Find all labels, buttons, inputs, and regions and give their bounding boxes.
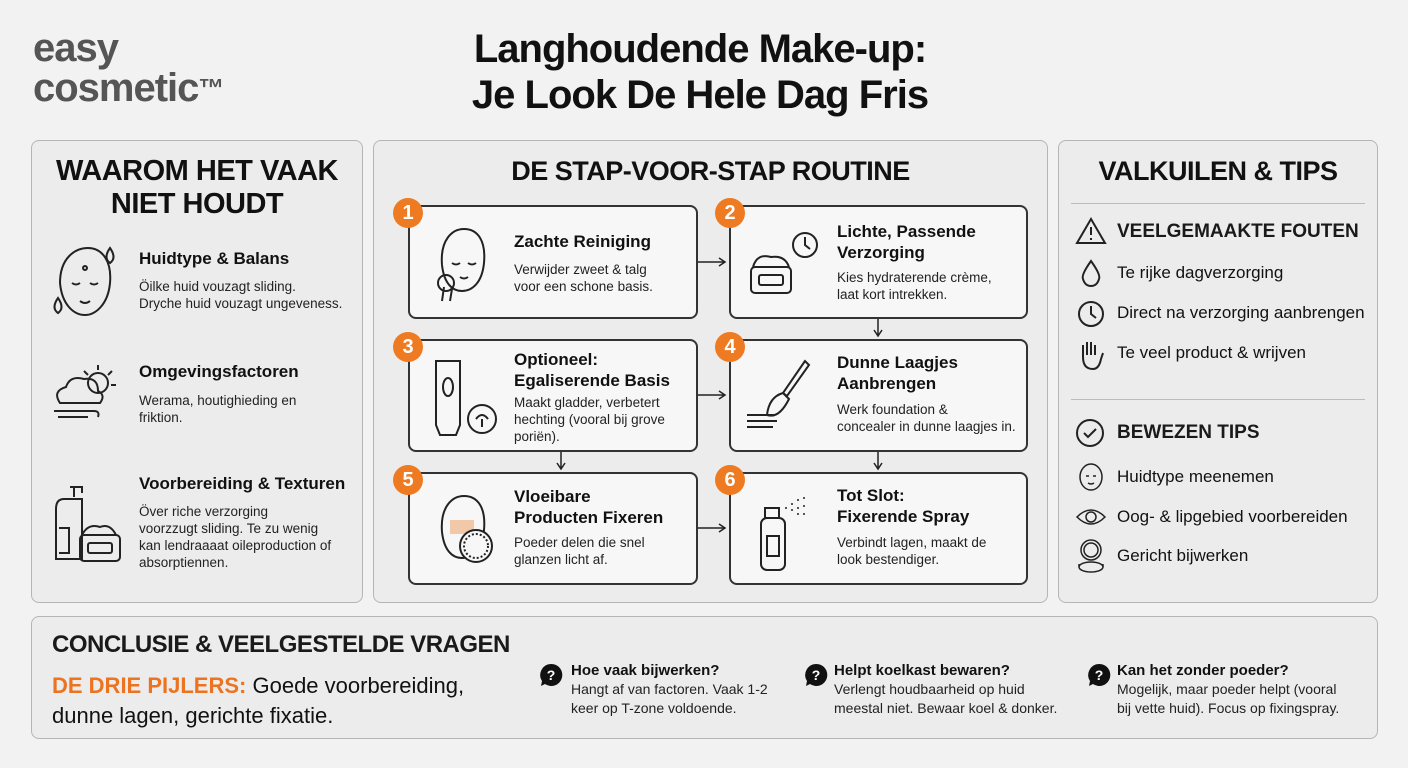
conclusion text: dunne lagen, gerichte fixatie. bbox=[52, 703, 333, 728]
step 1 bbox=[408, 205, 698, 319]
logo: cosmetic™ bbox=[33, 66, 223, 110]
icon: face cleansing bbox=[437, 228, 486, 302]
badge 4 bbox=[715, 332, 745, 362]
icon: warning bbox=[1075, 217, 1107, 244]
icon: face powder bbox=[440, 495, 493, 563]
panel: waarom het vaak niet houdt: voorzzugt sliding. Te zu wenig bbox=[139, 521, 318, 536]
step 6: Fixerende Spray bbox=[837, 507, 969, 526]
step 4: Aanbrengen bbox=[837, 374, 936, 393]
icon: cloud weather bbox=[54, 365, 116, 418]
step 3: Maakt gladder, verbetert bbox=[514, 395, 660, 410]
heading bbox=[56, 155, 338, 220]
faq 2 bbox=[805, 662, 1057, 716]
step 1: voor een schone basis. bbox=[514, 279, 653, 294]
heading: CONCLUSIE & VEELGESTELDE VRAGEN bbox=[52, 631, 510, 658]
step 2 bbox=[729, 205, 1028, 319]
icon: question bubble bbox=[1088, 664, 1110, 686]
item 2 text: Omgevingsfactoren bbox=[139, 362, 299, 381]
badge 5: 5 bbox=[402, 469, 414, 491]
step 6: Tot Slot: bbox=[837, 486, 905, 505]
panel: waarom het vaak niet houdt: Werama, houtighieding en bbox=[139, 393, 296, 408]
badge 4: 4 bbox=[724, 336, 736, 358]
badge 2: 2 bbox=[724, 202, 736, 224]
badge 3: 3 bbox=[402, 336, 414, 358]
step 6: look bestendiger. bbox=[837, 552, 939, 567]
badge 2 bbox=[715, 198, 745, 228]
panel: stap-voor-stap routine bbox=[373, 140, 1048, 603]
icon: spray bottle bbox=[760, 497, 805, 571]
faq 2: meestal niet. Bewaar koel & donker. bbox=[834, 700, 1057, 716]
faq 2: Helpt koelkast bewaren? bbox=[834, 662, 1010, 679]
panel: waarom het vaak niet houdt: kan lendraaaat oileproduction of bbox=[139, 538, 331, 553]
panel: valkuilen & tips: Oog- & lipgebied voorbereiden bbox=[1117, 507, 1348, 526]
icon: brush bbox=[747, 360, 810, 428]
step 1: Verwijder zweet & talg bbox=[514, 262, 647, 277]
icon: drop bbox=[1082, 259, 1100, 287]
faq 3: Mogelijk, maar poeder helpt (vooral bbox=[1117, 681, 1336, 697]
panel: waarom het vaak niet houdt: friktion. bbox=[139, 410, 183, 425]
panel: valkuilen & tips: Te rijke dagverzorging bbox=[1117, 263, 1283, 282]
panel: waarom het vaak niet houdt: Över riche verzorging bbox=[139, 504, 268, 519]
step 6: Verbindt lagen, maakt de bbox=[837, 535, 986, 550]
step 5: glanzen licht af. bbox=[514, 552, 608, 567]
title: Langhoudende Make-up: bbox=[474, 27, 926, 71]
panel: waarom het vaak niet houdt: Öilke huid vouzagt sliding. bbox=[139, 279, 296, 294]
faq 1: keer op T-zone voldoende. bbox=[571, 700, 737, 716]
step 4: Werk foundation & bbox=[837, 402, 948, 417]
icon: cream jar clock bbox=[750, 232, 818, 294]
subheading: fouten: VEELGEMAAKTE FOUTEN bbox=[1117, 221, 1359, 242]
badge 3 bbox=[393, 332, 423, 362]
icon: question bubble: ? bbox=[812, 667, 820, 683]
step 5: Vloeibare bbox=[514, 487, 591, 506]
step 4 bbox=[729, 339, 1028, 452]
item 3 text: Voorbereiding & Texturen bbox=[139, 474, 345, 493]
icon: check bbox=[1076, 419, 1104, 447]
faq 1 bbox=[540, 662, 768, 716]
icon: question bubble: ? bbox=[547, 667, 555, 683]
badge 5 bbox=[393, 465, 423, 495]
faq 1: Hangt af van factoren. Vaak 1-2 bbox=[571, 681, 768, 697]
subheading: tips: BEWEZEN TIPS bbox=[1117, 422, 1260, 443]
icon: question bubble bbox=[805, 664, 828, 686]
step 4: concealer in dunne laagjes in. bbox=[837, 419, 1016, 434]
heading: NIET HOUDT bbox=[111, 188, 283, 220]
icon: eye bbox=[1076, 509, 1106, 525]
step 5: Producten Fixeren bbox=[514, 508, 663, 527]
panel: waarom het vaak niet houdt bbox=[31, 140, 363, 603]
step 2: Verzorging bbox=[837, 243, 925, 262]
icon: face drops bbox=[53, 246, 115, 316]
step 3: Egaliserende Basis bbox=[514, 371, 670, 390]
icon: tube primer bbox=[435, 360, 497, 436]
panel: waarom het vaak niet houdt: Dryche huid vouzagt ungeveness. bbox=[139, 296, 342, 311]
step 2: Lichte, Passende bbox=[837, 222, 976, 241]
panel: valkuilen & tips: Huidtype meenemen bbox=[1117, 467, 1274, 486]
badge 1 bbox=[393, 198, 423, 228]
badge 1: 1 bbox=[402, 202, 414, 224]
faq 3 bbox=[1088, 662, 1339, 716]
step 6 bbox=[729, 472, 1028, 585]
step 1: Zachte Reiniging bbox=[514, 232, 651, 251]
conclusion text bbox=[52, 673, 464, 728]
faq 1: Hoe vaak bijwerken? bbox=[571, 662, 719, 679]
heading: VALKUILEN & TIPS bbox=[1098, 156, 1338, 186]
faq 3: bij vette huid). Focus op fixingspray. bbox=[1117, 700, 1339, 716]
panel: conclusie & faq bbox=[31, 616, 1378, 739]
icon: bottles bbox=[55, 486, 121, 562]
icon: question bubble bbox=[540, 664, 562, 686]
item 1 text: Huidtype & Balans bbox=[139, 249, 289, 268]
icon: clock bbox=[1078, 301, 1104, 327]
step 2: Kies hydraterende crème, bbox=[837, 270, 992, 285]
panel: waarom het vaak niet houdt: absorptiennen. bbox=[139, 555, 228, 570]
panel: valkuilen & tips: Te veel product & wrijven bbox=[1117, 343, 1306, 362]
badge 6: 6 bbox=[724, 469, 736, 491]
logo: easy bbox=[33, 26, 118, 70]
icon: hand bbox=[1082, 342, 1104, 370]
step 3: Optioneel: bbox=[514, 350, 598, 369]
faq 2: Verlengt houdbaarheid op huid bbox=[834, 681, 1025, 697]
step 5 bbox=[408, 472, 698, 585]
logo bbox=[33, 26, 223, 110]
step 4: Dunne Laagjes bbox=[837, 353, 958, 372]
panel: valkuilen & tips: Gericht bijwerken bbox=[1117, 546, 1248, 565]
step 3: hechting (vooral bij grove bbox=[514, 412, 665, 427]
icon: compact bbox=[1078, 539, 1104, 573]
badge 6 bbox=[715, 465, 745, 495]
step 3 bbox=[408, 339, 698, 452]
title bbox=[472, 27, 928, 117]
title: Je Look De Hele Dag Fris bbox=[472, 73, 928, 117]
faq 3: Kan het zonder poeder? bbox=[1117, 662, 1289, 679]
step 2: laat kort intrekken. bbox=[837, 287, 947, 302]
icon: face bbox=[1079, 463, 1103, 491]
heading: WAAROM HET VAAK bbox=[56, 155, 338, 187]
step 3: poriën). bbox=[514, 429, 560, 444]
heading: DE STAP-VOOR-STAP ROUTINE bbox=[511, 156, 910, 186]
panel: valkuilen & tips bbox=[1058, 140, 1378, 603]
panel: valkuilen & tips: Direct na verzorging aanbrengen bbox=[1117, 303, 1365, 322]
step 5: Poeder delen die snel bbox=[514, 535, 645, 550]
icon: question bubble: ? bbox=[1095, 667, 1103, 683]
conclusion text: DE DRIE PIJLERS: Goede voorbereiding, bbox=[52, 673, 464, 698]
